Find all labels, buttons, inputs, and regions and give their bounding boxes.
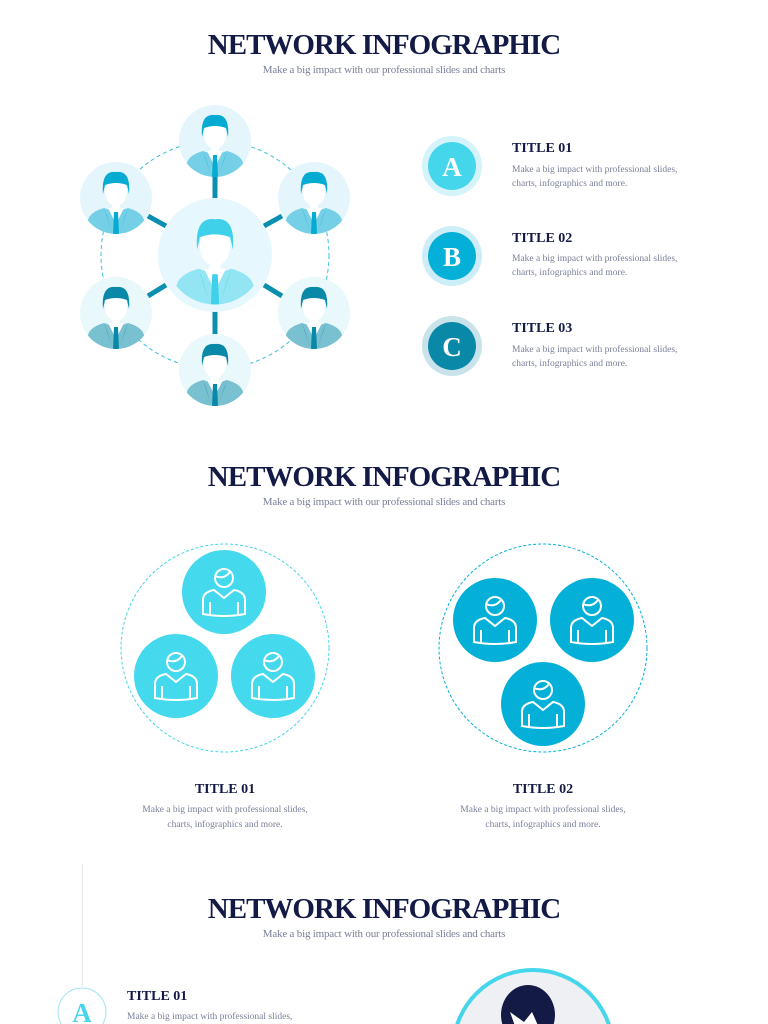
title: section 1: Make a big impact with our professional slides and charts <box>263 64 505 76</box>
caption 2: TITLE 02 <box>513 782 573 797</box>
list item A: charts, infographics and more. <box>512 178 627 189</box>
list item A: Make a big impact with professional slides, <box>512 164 677 175</box>
list item C <box>422 316 677 376</box>
list item B: Make a big impact with professional slides, <box>512 253 677 264</box>
list item C: C <box>442 332 462 362</box>
list item C: charts, infographics and more. <box>512 358 627 369</box>
list item A section 3: TITLE 01 <box>127 989 187 1004</box>
icon: lower right person <box>278 277 350 353</box>
icon: lower left person <box>80 277 152 353</box>
list item B: charts, infographics and more. <box>512 267 627 278</box>
icon: bottom person <box>179 334 251 410</box>
list item B: B <box>443 242 461 272</box>
icon: upper left person <box>80 162 152 238</box>
title: section 3 <box>208 893 560 940</box>
group 1 <box>121 544 329 752</box>
list item A: TITLE 01 <box>512 141 572 156</box>
title: section 1: NETWORK INFOGRAPHIC <box>208 29 560 61</box>
list item B <box>422 226 677 286</box>
title: section 3: NETWORK INFOGRAPHIC <box>208 893 560 925</box>
network diagram <box>80 105 350 410</box>
caption 2: charts, infographics and more. <box>485 819 601 830</box>
icon: woman portrait <box>453 970 613 1024</box>
group 2 <box>439 544 647 752</box>
list item B: TITLE 02 <box>512 231 572 246</box>
list item A: A <box>442 152 462 182</box>
title: section 2: Make a big impact with our professional slides and charts <box>263 496 505 508</box>
list item C: TITLE 03 <box>512 321 572 336</box>
caption 2 <box>460 782 626 830</box>
caption 2: Make a big impact with professional slides, <box>460 804 626 815</box>
list item A section 3 <box>58 988 292 1024</box>
caption 1 <box>142 782 308 830</box>
caption 1: TITLE 01 <box>195 782 255 797</box>
title: section 2 <box>208 461 560 508</box>
icon: center person <box>158 198 272 312</box>
list item A <box>422 136 677 196</box>
icon: top person <box>179 105 251 181</box>
caption 1: Make a big impact with professional slides, <box>142 804 308 815</box>
title: section 3: Make a big impact with our professional slides and charts <box>263 928 505 940</box>
list item A section 3: Make a big impact with professional slides, <box>127 1011 292 1022</box>
list item C: Make a big impact with professional slides, <box>512 344 677 355</box>
title: section 1 <box>208 29 560 76</box>
icon: upper right person <box>278 162 350 238</box>
caption 1: charts, infographics and more. <box>167 819 283 830</box>
title: section 2: NETWORK INFOGRAPHIC <box>208 461 560 493</box>
